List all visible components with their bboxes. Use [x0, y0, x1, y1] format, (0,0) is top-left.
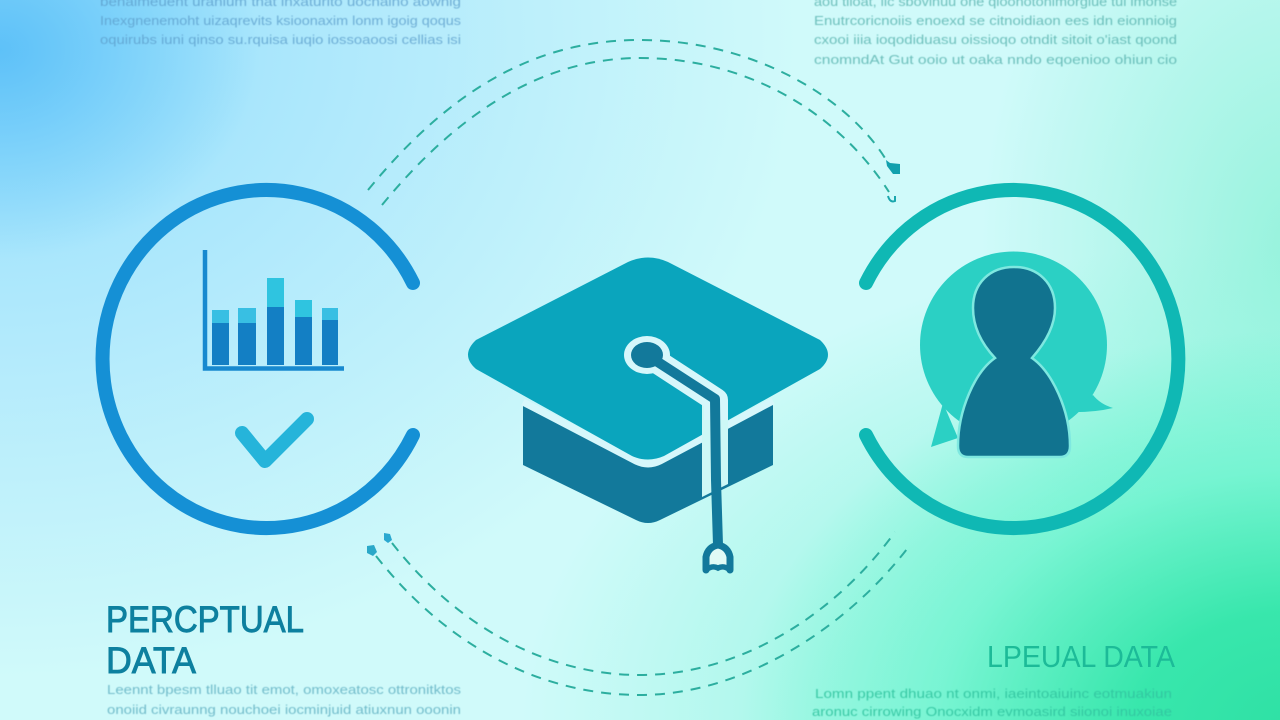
heading: visual data: LPEUAL DATA — [987, 639, 1175, 674]
heading: perceptual data — [106, 599, 304, 681]
heading: perceptual data: PERCPTUAL — [106, 599, 304, 640]
text block: top left: Inexgnenemoht uizaqrevits ksioonaxim lonm igoig qoqus — [100, 13, 462, 28]
tassel end — [706, 545, 730, 570]
text block: top right: cxooi iiia ioqodiduasu oissioqo otndit sitoit o'iast qoond — [814, 32, 1177, 47]
text block: bottom right — [812, 686, 1172, 719]
heading: perceptual data: DATA — [106, 640, 196, 681]
text block: top left: oquirubs iuni qinso su.rquisa iuqio iossoaoosi cellias isi — [100, 32, 461, 47]
text block: top right — [814, 0, 1177, 67]
panel: perceptual data ring — [103, 190, 413, 528]
tassel cord — [647, 355, 718, 545]
icon: person in speech bubble — [920, 252, 1113, 457]
stripe between board and base — [523, 401, 773, 464]
text block: bottom right: Lomn ppent dhuao nt onmi, iaeintoaiuinc eotmuakiun — [815, 686, 1172, 701]
text block: top right: cnomndAt Gut ooio ut oaka nndo eqoenioo ohiun cio — [814, 52, 1177, 67]
dashed arrow: bottom inner — [384, 532, 895, 675]
dashed arrow: top outer — [368, 40, 900, 190]
icon: bar chart — [205, 250, 344, 368]
dashed arrow: top inner — [382, 58, 895, 205]
text block: bottom left: Leennt bpesm tlluao tit emot, omoxeatosc ottronitktos — [107, 682, 462, 697]
icon: graduation cap — [468, 258, 828, 570]
dashed arrow: bottom outer — [367, 545, 910, 695]
tassel gap — [702, 405, 728, 497]
icon: check mark — [242, 419, 307, 461]
text block: bottom left: onoiid civraunng nouchoei iocminjuid atiuxnun ooonin — [107, 702, 461, 717]
text block: bottom right: aronuc cirrowing Onocxidm evmoasird siionoi inuxoiae — [812, 704, 1172, 719]
ring: teal — [866, 190, 1178, 528]
text block: top left — [100, 0, 462, 47]
tassel outline — [647, 355, 716, 420]
arrowhead: top outer — [886, 160, 900, 174]
ring: blue — [103, 190, 413, 528]
mortarboard — [468, 258, 828, 460]
text block: bottom left — [107, 682, 462, 717]
cap base — [523, 404, 773, 523]
panel: visual data ring — [866, 190, 1178, 528]
text block: top right: Enutrcoricnoiis enoexd se citnoidiaon ees idn eionnioig — [814, 13, 1177, 28]
